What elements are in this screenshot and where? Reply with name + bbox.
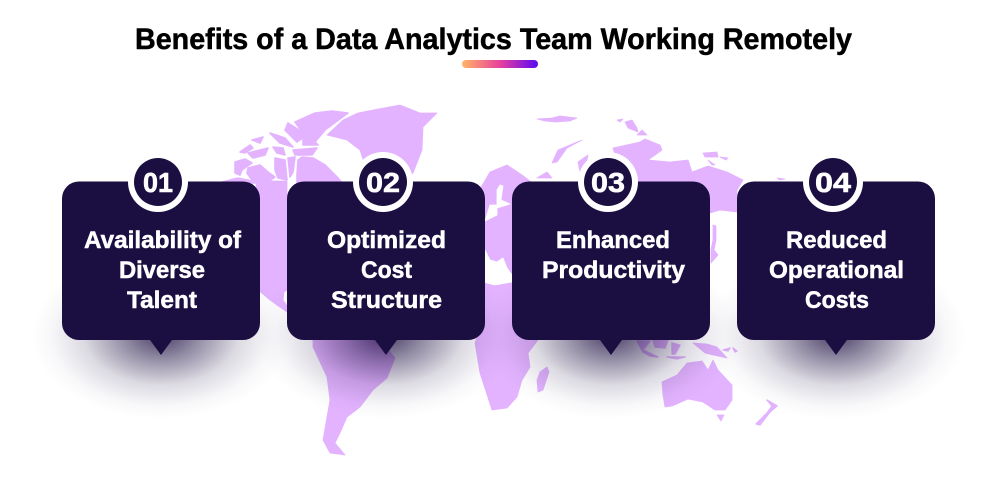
badge 04: 04 — [815, 167, 851, 198]
map: Baltic sea — [478, 185, 510, 221]
card 01 — [62, 152, 260, 355]
map: Russian Arctic islands — [537, 119, 785, 180]
card 03 — [512, 152, 710, 355]
map: Canadian archipelago — [222, 111, 348, 183]
card 04 label — [769, 227, 904, 314]
badge 01 — [128, 152, 188, 212]
badge 02 — [353, 152, 413, 212]
card 03 body with pointer — [512, 182, 710, 355]
title: Benefits of a Data Analytics Team Working Remotely — [135, 23, 853, 56]
card 04 body with pointer — [737, 182, 935, 355]
map: Mediterranean sea — [480, 250, 512, 285]
world map — [222, 105, 785, 455]
card 02 — [287, 152, 485, 355]
badge 03: 03 — [591, 167, 625, 198]
card 01 label — [84, 227, 242, 314]
card 04 label: Reduced — [786, 227, 887, 254]
map: Svalbard islands — [537, 116, 577, 122]
card 04 — [737, 152, 935, 355]
card 02 label: Optimized — [327, 227, 446, 254]
badge 02: 02 — [366, 167, 400, 198]
card 01 label: Diverse — [119, 257, 205, 284]
card 03 label: Productivity — [542, 257, 686, 284]
card 04 label: Operational — [769, 257, 904, 284]
card 01 body with pointer — [62, 182, 260, 355]
card 02 label: Cost — [361, 257, 412, 284]
map: Tasmania — [717, 415, 724, 421]
badge 04 — [803, 152, 863, 212]
card 03 label: Enhanced — [556, 227, 670, 254]
card 01 label: Talent — [127, 287, 197, 314]
map: Greenland — [327, 105, 437, 181]
map: Southeast Asia — [637, 340, 737, 359]
card 03 label — [542, 227, 686, 284]
map: North America mainland — [256, 181, 287, 312]
card shadows — [31, 251, 966, 419]
map: New Guinea — [693, 343, 727, 358]
card 01 label: Availability of — [84, 227, 242, 254]
title underline gradient bar — [462, 60, 538, 68]
card 02 label: Structure — [331, 287, 442, 314]
map: Europe and Africa mass — [475, 165, 538, 410]
card 02 label — [327, 227, 446, 314]
card 04 label: Costs — [805, 287, 869, 314]
card 02 body with pointer — [287, 182, 485, 355]
badge 01: 01 — [143, 167, 173, 198]
map: Madagascar — [537, 367, 549, 392]
map: Asia mainland — [613, 139, 743, 213]
badge 03 — [578, 152, 638, 212]
map: Japan — [711, 225, 718, 263]
map: South America — [313, 340, 395, 455]
map: New Zealand — [756, 400, 777, 425]
map: Australia — [662, 360, 732, 410]
